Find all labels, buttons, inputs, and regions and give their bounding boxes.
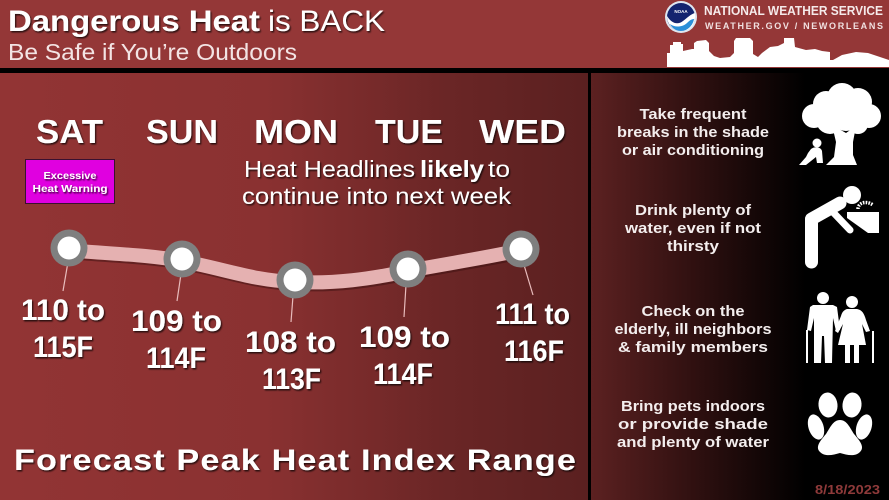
- header banner: [0, 0, 889, 68]
- title: [8, 5, 385, 38]
- divider between panels: [588, 73, 591, 500]
- tip: shade: Take frequent: [640, 106, 746, 123]
- chart caption: Forecast Peak Heat Index Range: [14, 444, 577, 477]
- heat index values: 110 to: [21, 294, 105, 327]
- excessive heat warning badge: Excessive: [44, 170, 97, 182]
- day labels: [36, 113, 566, 150]
- tip: neighbors: [614, 303, 772, 356]
- heat index values: 111 to: [495, 298, 570, 331]
- trend line chart: [50, 230, 540, 322]
- panel: safety tips background: [591, 73, 889, 500]
- heat index values: 108 to: [245, 326, 336, 359]
- tip: water: thirsty: [667, 238, 720, 255]
- icon: paw print: [805, 392, 875, 455]
- subtitle: Be Safe if You’re Outdoors: [8, 39, 297, 65]
- header separator bar: [0, 68, 889, 73]
- title: Dangerous Heat: [8, 5, 260, 38]
- tip: pets: Bring pets indoors: [621, 398, 765, 415]
- NWS web address: WEATHER.GOV / NEWORLEANS: [705, 21, 883, 31]
- leader lines: [63, 262, 533, 322]
- excessive heat warning badge: [26, 160, 114, 204]
- heat index values: 109 to: [359, 321, 450, 354]
- icon: NOAA logo: [665, 1, 697, 33]
- heat index values: 113F: [262, 363, 321, 396]
- day labels: MON: [254, 113, 338, 150]
- panel: forecast background: [0, 73, 588, 500]
- heat headlines note: Heat Headlines: [244, 156, 415, 182]
- heat headlines note: continue into next week: [242, 183, 512, 209]
- day labels: WED: [479, 113, 566, 150]
- heat index values: 116F: [504, 335, 564, 368]
- tip: pets: and plenty of water: [617, 434, 769, 451]
- tip: water: Drink plenty of: [635, 202, 752, 219]
- NWS name: NATIONAL WEATHER SERVICE: [704, 4, 883, 18]
- date stamp: 8/18/2023: [815, 482, 880, 497]
- tip: shade: breaks in the shade: [617, 124, 769, 141]
- tip: water: water, even if not: [624, 220, 761, 237]
- tip: pets: [617, 398, 769, 451]
- day labels: SAT: [36, 113, 103, 150]
- data point markers: [50, 230, 540, 298]
- day labels: SUN: [146, 113, 218, 150]
- heat index values: 109 to: [131, 305, 222, 338]
- tip: pets: or provide shade: [618, 416, 768, 433]
- skyline silhouette: [667, 38, 889, 67]
- heat headlines note: likely: [420, 156, 484, 182]
- heat index values: 114F: [373, 358, 433, 391]
- excessive heat warning badge: Heat Warning: [32, 183, 108, 195]
- icon: person at water fountain: [812, 186, 879, 262]
- tip: neighbors: elderly, ill neighbors: [614, 321, 772, 338]
- tip: neighbors: & family members: [618, 339, 768, 356]
- icon: NOAA logo: NOAA: [674, 9, 688, 14]
- tip: neighbors: Check on the: [642, 303, 744, 320]
- heat headlines note: [242, 156, 512, 209]
- heat index values: 114F: [146, 342, 206, 375]
- icon: tree with seated person: [799, 83, 881, 165]
- tip: shade: or air conditioning: [622, 142, 764, 159]
- heat index values: 115F: [33, 331, 93, 364]
- icon: elderly couple with canes: [806, 292, 874, 363]
- title: is BACK: [268, 5, 385, 38]
- day labels: TUE: [375, 113, 443, 150]
- tip: shade: [617, 106, 769, 159]
- heat index values: [21, 294, 570, 396]
- heat headlines note: to: [488, 156, 510, 182]
- tip: water: [624, 202, 761, 255]
